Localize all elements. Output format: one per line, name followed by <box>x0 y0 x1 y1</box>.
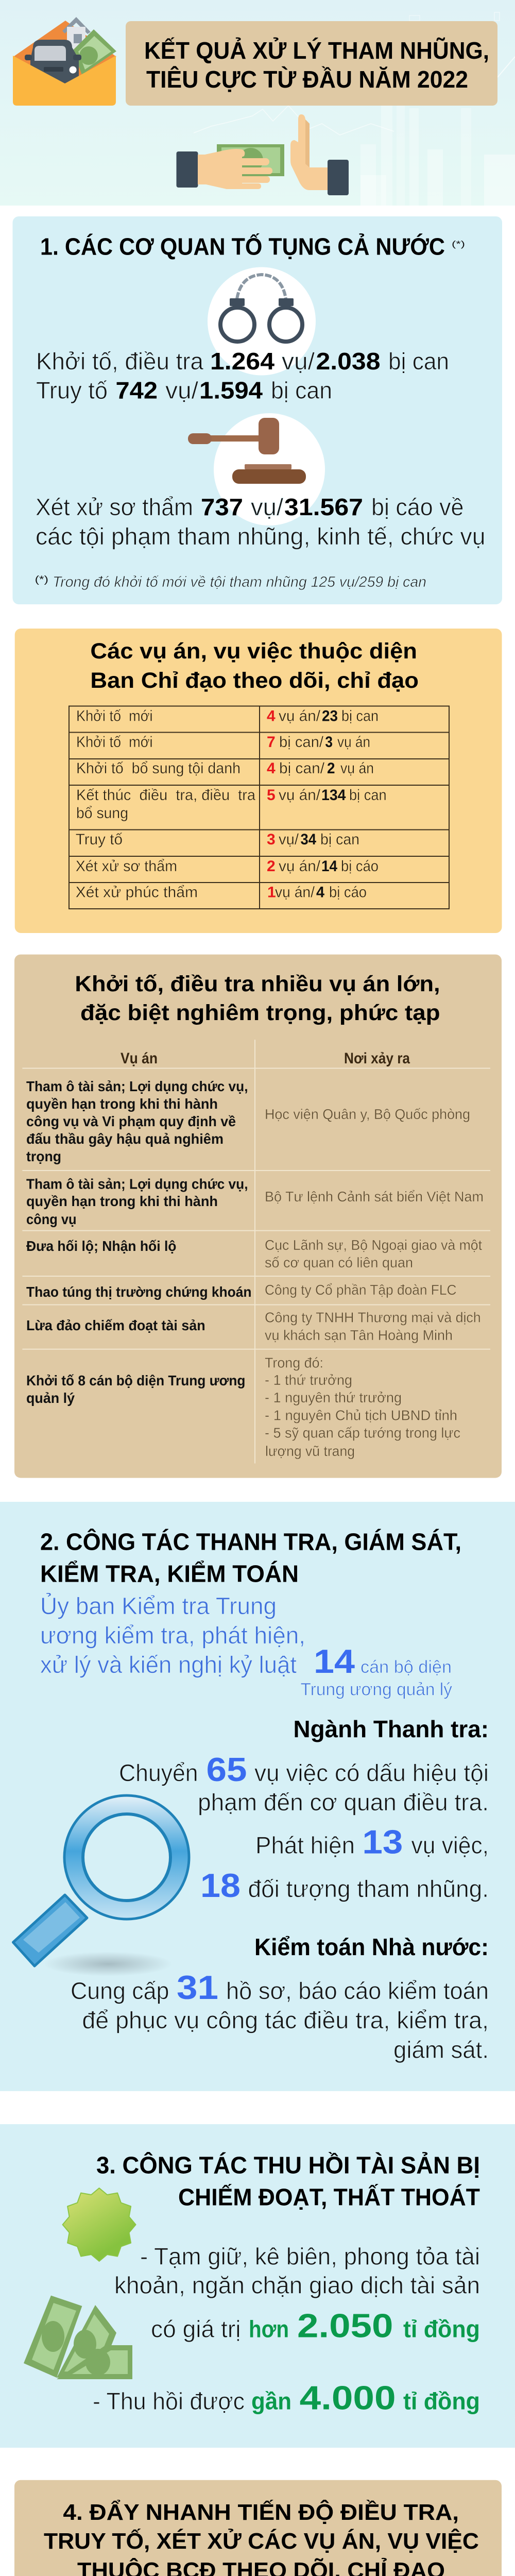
panel: major cases prosecuted <box>14 955 502 1478</box>
text: inspection sector: vụ việc có dấu hiệu tội <box>254 1759 489 1786</box>
table: case counts: 2 <box>267 858 276 875</box>
panel: 3. asset recovery <box>0 2124 515 2448</box>
table: major cases and locations: Tham ô tài sản; Lợi dụng chức vụ, <box>26 1176 248 1192</box>
table: case counts: bị can/ <box>279 760 325 777</box>
table: case counts: 4 <box>267 708 276 724</box>
icon: green badge <box>63 2188 136 2261</box>
table: case counts: vụ án <box>337 734 370 751</box>
table: major cases and locations: Trong đó: <box>265 1355 323 1371</box>
table: major cases and locations: Lừa đảo chiếm đoạt tài sản <box>26 1317 205 1333</box>
text: assets frozen: khoản, ngăn chặn giao dịch tài sản <box>114 2272 480 2298</box>
heading: section 1: (*) <box>452 239 465 249</box>
table: case counts: bị cáo <box>329 884 367 901</box>
table: major cases and locations: Tham ô tài sản; Lợi dụng chức vụ, <box>26 1078 248 1094</box>
table: case counts: vụ án/ <box>275 884 315 901</box>
table: case counts: bị can <box>349 787 387 804</box>
table: case counts: 1 <box>267 884 276 901</box>
text: assets recovered: 4.000 <box>300 2379 396 2416</box>
table: case counts: Khởi tố mới <box>76 734 152 751</box>
panel: title box <box>126 21 497 106</box>
text: state audit <box>71 1934 489 2063</box>
heading: section 4: 4. ĐẨY NHANH TIẾN ĐỘ ĐIỀU TRA, <box>63 2499 459 2525</box>
table: case counts: 7 <box>267 734 276 751</box>
text: investigation and prosecution figures: vụ/ <box>282 348 315 375</box>
text: investigation and prosecution figures: vụ/ <box>165 377 198 404</box>
table: major cases and locations: quyền hạn trong khi thi hành <box>26 1193 218 1209</box>
text: trial figures <box>36 494 486 550</box>
text: assets frozen <box>114 2243 480 2344</box>
text: trial figures: Xét xử sơ thẩm <box>36 494 193 520</box>
text: inspection sector: 18 <box>200 1867 241 1904</box>
text: central inspection commission: cán bộ diện <box>360 1657 452 1677</box>
text: investigation and prosecution figures: 1.264 <box>210 348 274 375</box>
panel: 1. prosecuting agencies <box>12 216 502 604</box>
table: case counts: Khởi tố mới <box>76 708 152 724</box>
heading: section 3: CHIẾM ĐOẠT, THẤT THOÁT <box>178 2184 480 2211</box>
table: major cases and locations: Khởi tố 8 cán bộ diện Trung ương <box>26 1372 245 1388</box>
table: case counts: 2 <box>327 760 335 777</box>
text: assets frozen: tỉ đồng <box>403 2315 480 2342</box>
text: inspection sector: Phát hiện <box>255 1832 355 1858</box>
table: major cases and locations: - 1 thứ trưởng <box>265 1372 352 1388</box>
text: assets recovered: - Thu hồi được <box>93 2387 245 2414</box>
text: inspection sector: đối tượng tham nhũng. <box>248 1875 489 1902</box>
table: case counts: vụ án/ <box>279 708 321 724</box>
text: state audit: Kiểm toán Nhà nước: <box>254 1934 489 1960</box>
heading: section 3: 3. CÔNG TÁC THU HỒI TÀI SẢN BỊ <box>96 2151 480 2178</box>
table: case counts: Kết thúc điều tra, điều tra <box>76 787 255 804</box>
text: assets recovered: gần <box>251 2387 291 2414</box>
text: trial figures: 737 <box>201 494 243 520</box>
text: investigation and prosecution figures: bị can <box>271 377 332 404</box>
heading: major cases <box>75 972 440 1025</box>
text: assets recovered <box>93 2379 480 2416</box>
text: investigation and prosecution figures: 742 <box>115 377 158 404</box>
text: investigation and prosecution figures: Khởi tố, điều tra <box>36 348 203 375</box>
text: state audit: 31 <box>177 1969 218 2006</box>
text: trial figures: các tội phạm tham nhũng, kinh tế, chức vụ <box>36 523 486 550</box>
text: trial figures: vụ/ <box>251 494 283 520</box>
table: case counts: 4 <box>267 760 276 777</box>
text: assets frozen: hơn <box>249 2315 289 2342</box>
text: inspection sector: 13 <box>362 1823 403 1860</box>
table: major cases and locations: quyền hạn trong khi thi hành <box>26 1096 218 1112</box>
heading: cases under steering committee: Ban Chỉ đạo theo dõi, chỉ đạo <box>90 668 419 693</box>
text: trial figures: 31.567 <box>284 494 363 520</box>
table: case counts: bị can <box>320 831 359 848</box>
table: case counts: 134 <box>321 787 346 804</box>
table: major cases and locations: công vụ <box>26 1211 77 1227</box>
text: assets frozen: 2.050 <box>297 2307 393 2344</box>
heading: section 3 <box>96 2151 480 2211</box>
text: inspection sector: vụ việc, <box>411 1832 489 1858</box>
text: assets recovered: tỉ đồng <box>403 2387 480 2414</box>
text: state audit: để phục vụ công tác điều tra, kiểm tra, <box>82 2007 489 2033</box>
table: case counts: 23 <box>322 708 338 724</box>
text: trial figures: bị cáo về <box>371 494 464 520</box>
table: major cases and locations: Công ty Cổ phần Tập đoàn FLC <box>265 1282 456 1298</box>
table: major cases and locations <box>22 1040 490 1463</box>
table: case counts: bổ sung <box>76 805 128 822</box>
heading: cases under steering committee <box>90 639 419 693</box>
table: major cases and locations: Cục Lãnh sự, Bộ Ngoại giao và một <box>265 1237 482 1253</box>
table: major cases and locations: đấu thầu gây hậu quả nghiêm <box>26 1131 224 1147</box>
table: major cases and locations: số cơ quan có liên quan <box>265 1255 413 1270</box>
title: KẾT QUẢ XỬ LÝ THAM NHŨNG, <box>144 37 489 64</box>
table: major cases and locations: quản lý <box>26 1390 75 1406</box>
panel: header background <box>0 0 515 206</box>
table: case counts: bị can <box>341 708 379 724</box>
table: case counts: bị can/ <box>279 734 324 751</box>
table: case counts: 5 <box>267 787 276 804</box>
table: case counts <box>69 706 449 909</box>
heading: section 2: 2. CÔNG TÁC THANH TRA, GIÁM SÁT, <box>40 1528 461 1555</box>
panel: 4. speeding up investigations <box>14 2480 502 2576</box>
table: case counts: vụ án/ <box>279 787 321 804</box>
text: central inspection commission: 14 <box>314 1642 355 1680</box>
text: central inspection commission <box>40 1592 452 1700</box>
table: case counts: 14 <box>321 858 337 875</box>
table: major cases and locations: vụ khách sạn Tân Hoàng Minh <box>265 1327 453 1343</box>
table: major cases and locations: Học viện Quân y, Bộ Quốc phòng <box>265 1106 470 1122</box>
text: inspection sector: Chuyển <box>119 1759 198 1786</box>
title <box>144 37 489 93</box>
table: major cases and locations: - 5 sỹ quan cấp tướng trong lực <box>265 1425 460 1441</box>
heading: cases under steering committee: Các vụ án, vụ việc thuộc diện <box>90 639 417 664</box>
text: investigation and prosecution figures: Truy tố <box>36 377 108 404</box>
text: investigation and prosecution figures: 1.594 <box>199 377 263 404</box>
text: investigation and prosecution figures: 2.038 <box>316 348 380 375</box>
table: case counts: Truy tố <box>76 831 123 848</box>
text: inspection sector: phạm đến cơ quan điều tra. <box>198 1789 489 1816</box>
table: major cases and locations: Đưa hối lộ; Nhận hối lộ <box>26 1238 176 1254</box>
table: case counts: 4 <box>316 884 324 901</box>
table: major cases and locations: công vụ và Vi phạm quy định về <box>26 1113 236 1129</box>
table: major cases and locations: - 1 nguyên thứ trưởng <box>265 1389 402 1405</box>
table: case counts: vụ án <box>340 760 374 777</box>
table: major cases and locations: trọng <box>26 1148 61 1164</box>
heading: section 4: TRUY TỐ, XÉT XỬ CÁC VỤ ÁN, VỤ VIỆC <box>44 2528 479 2554</box>
table: major cases and locations: lượng vũ trang <box>265 1443 355 1459</box>
icon: magnifying glass <box>13 1795 189 1976</box>
heading: section 2: KIỂM TRA, KIỂM TOÁN <box>40 1561 299 1587</box>
table: major cases and locations: - 1 nguyên Chủ tịch UBND tỉnh <box>265 1408 457 1423</box>
icon: hand offering money and refusing hand <box>176 114 349 195</box>
table: case counts: vụ án/ <box>279 858 321 875</box>
text: central inspection commission: xử lý và kiến nghị kỷ luật <box>40 1651 297 1678</box>
table: major cases and locations: Vụ án <box>121 1050 158 1067</box>
text: central inspection commission: Trung ương quản lý <box>301 1680 452 1700</box>
text: state audit: hồ sơ, báo cáo kiểm toán <box>226 1977 489 2004</box>
text: inspection sector: Ngành Thanh tra: <box>294 1716 489 1742</box>
panel: 2. inspection, supervision and audit <box>0 1502 515 2091</box>
heading: section 1: 1. CÁC CƠ QUAN TỐ TỤNG CẢ NƯỚC <box>40 233 445 260</box>
table: major cases and locations: Thao túng thị trường chứng khoán <box>26 1284 251 1300</box>
table: case counts: 3 <box>267 831 276 848</box>
footnote: (*) <box>35 574 48 585</box>
table: major cases and locations: Bộ Tư lệnh Cảnh sát biển Việt Nam <box>265 1189 484 1205</box>
text: investigation and prosecution figures <box>36 348 449 404</box>
table: major cases and locations: Nơi xảy ra <box>344 1050 410 1067</box>
table: case counts: Xét xử sơ thẩm <box>76 858 177 875</box>
title: TIÊU CỰC TỪ ĐẦU NĂM 2022 <box>146 66 468 93</box>
table: case counts: bị cáo <box>341 858 379 875</box>
text: investigation and prosecution figures: bị can <box>388 348 449 375</box>
table: case counts: vụ/ <box>279 831 299 848</box>
table: case counts: 34 <box>301 831 316 848</box>
text: inspection sector <box>119 1716 489 1904</box>
footnote: Trong đó khởi tố mới về tội tham nhũng 125 vụ/259 bị can <box>53 574 426 590</box>
heading: major cases: đặc biệt nghiêm trọng, phức tạp <box>80 1001 440 1025</box>
icon: gavel <box>188 413 325 526</box>
text: central inspection commission: ương kiểm tra, phát hiện, <box>40 1622 305 1649</box>
text: assets frozen: có giá trị <box>151 2315 241 2342</box>
heading: section 4 <box>44 2499 479 2576</box>
table: case counts: Khởi tố bổ sung tội danh <box>76 760 241 777</box>
text: inspection sector: 65 <box>206 1751 247 1788</box>
heading: section 2 <box>40 1528 461 1587</box>
text: state audit: giám sát. <box>393 2036 489 2063</box>
icon: handcuffs <box>208 267 316 375</box>
text: central inspection commission: Ủy ban Kiểm tra Trung <box>40 1592 277 1619</box>
table: major cases and locations: Công ty TNHH Thương mại và dịch <box>265 1310 481 1325</box>
text: assets frozen: - Tạm giữ, kê biên, phong tỏa tài <box>140 2243 480 2269</box>
icon: envelope with house car and money <box>13 17 116 106</box>
table: case counts: Xét xử phúc thẩm <box>76 884 198 901</box>
table: case counts: 3 <box>325 734 333 751</box>
heading: major cases: Khởi tố, điều tra nhiều vụ án lớn, <box>75 972 440 996</box>
text: state audit: Cung cấp <box>71 1977 169 2004</box>
icon: banknotes <box>24 2296 132 2379</box>
panel: cases under steering committee <box>15 629 502 933</box>
